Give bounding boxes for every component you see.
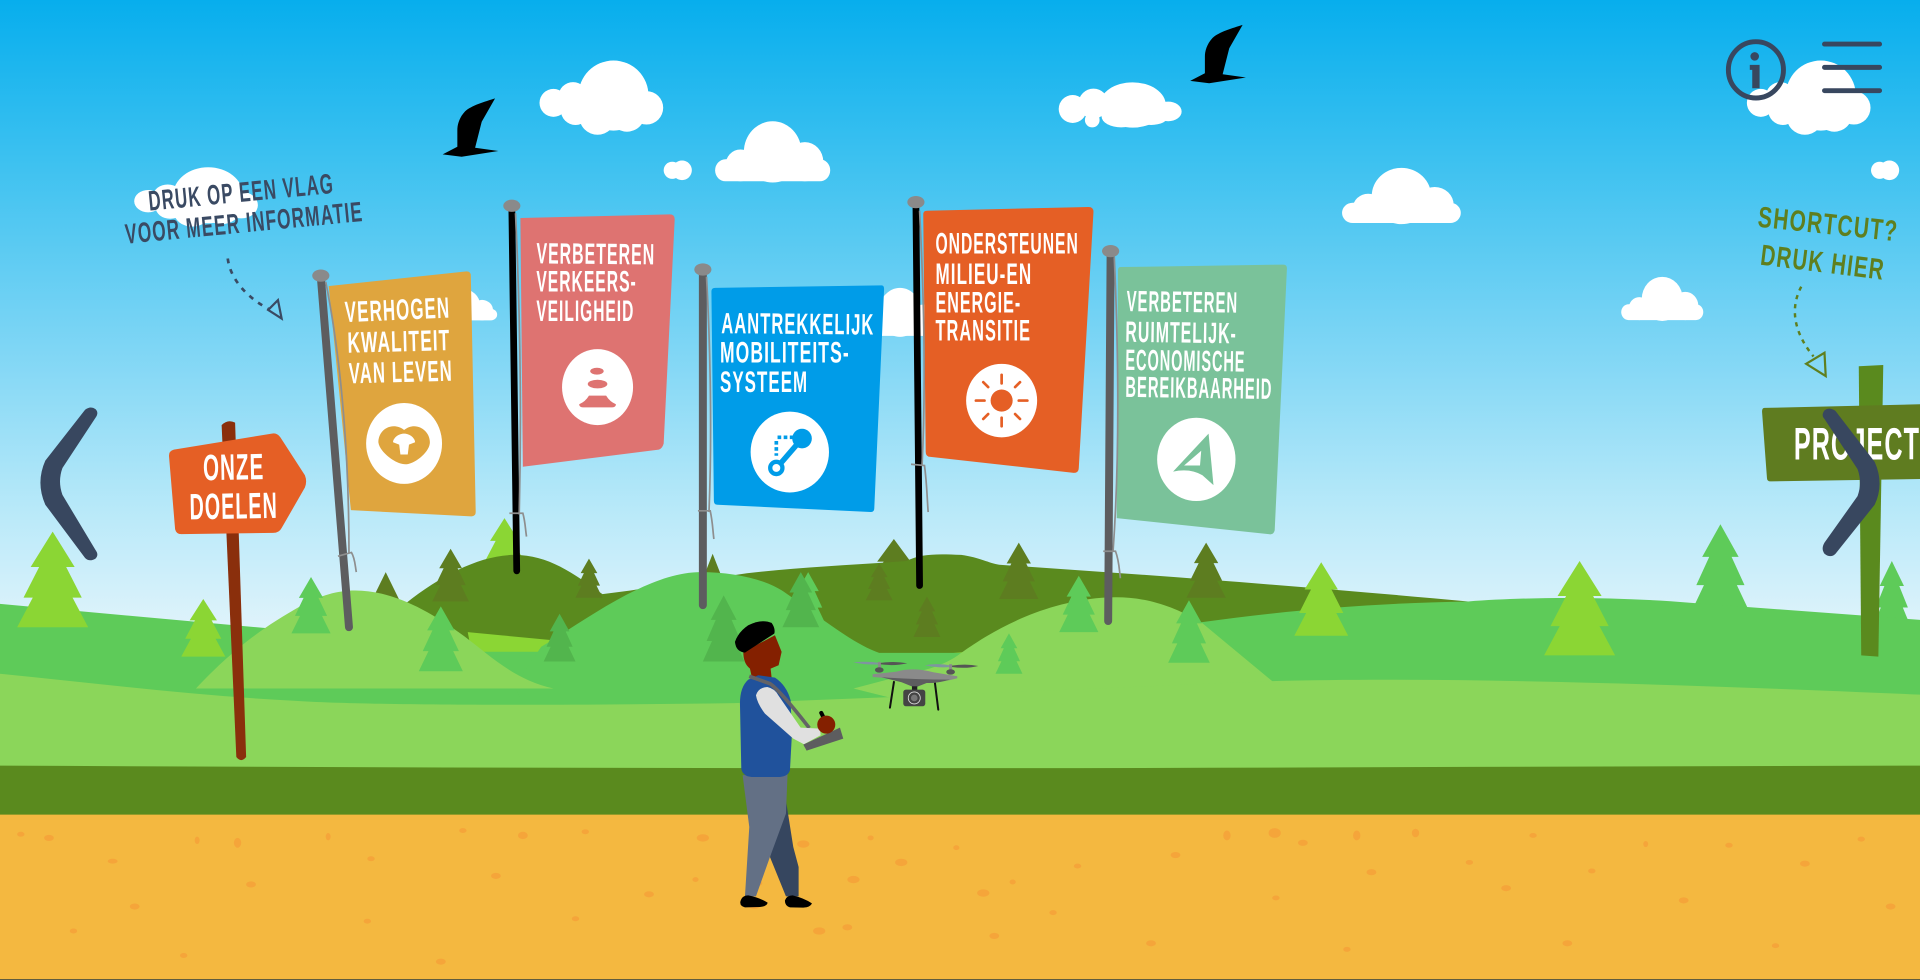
icon: info	[1728, 42, 1783, 98]
label: VERKEERS-	[536, 266, 637, 299]
icon: route	[751, 412, 829, 492]
label: BEREIKBAARHEID	[1125, 371, 1273, 406]
beret	[735, 621, 775, 653]
hill: right mid green	[1201, 598, 1920, 710]
arrow: next	[1823, 409, 1880, 556]
hill: left light green	[196, 590, 553, 688]
back leg	[770, 800, 799, 896]
sign post	[1859, 365, 1883, 657]
banner	[520, 214, 675, 467]
person with remote control	[735, 621, 843, 908]
rope	[698, 277, 714, 539]
label	[1125, 285, 1273, 406]
sky	[0, 0, 1920, 637]
pole	[700, 272, 706, 605]
label: ENERGIE-	[936, 286, 1021, 319]
drone	[853, 662, 978, 710]
sign text: DOELEN	[189, 485, 278, 527]
icon: menu	[1824, 44, 1880, 91]
sand path	[0, 815, 1920, 980]
hill: centre mid green	[514, 572, 967, 710]
banner	[923, 207, 1093, 473]
pole	[916, 205, 920, 586]
label: ONDERSTEUNEN	[936, 228, 1079, 261]
joystick	[821, 713, 825, 720]
sign board	[1762, 404, 1920, 481]
label: MOBILITEITS-	[720, 337, 850, 370]
label: TRANSITIE	[936, 315, 1031, 348]
label	[536, 237, 655, 328]
rope	[326, 282, 356, 572]
body	[873, 669, 957, 688]
clouds	[134, 61, 1899, 337]
head	[743, 635, 782, 678]
label: VERBETEREN	[1126, 285, 1238, 320]
label	[720, 307, 875, 399]
annotation: druk op een vlag	[124, 168, 364, 250]
sign post	[222, 421, 246, 760]
camera	[912, 686, 917, 691]
trees on the far ridge	[432, 543, 1226, 662]
sign board	[169, 433, 306, 534]
label	[936, 228, 1079, 348]
label: VAN LEVEN	[348, 355, 453, 390]
label: AANTREKKELIJK	[721, 307, 875, 342]
arrow: to the shortcut	[1795, 287, 1826, 376]
rope	[1103, 257, 1120, 578]
foreground light green field	[0, 674, 1920, 772]
sign: project	[1762, 365, 1920, 657]
icon: traffic cone	[562, 349, 633, 425]
arm	[756, 687, 821, 744]
icon: sun	[966, 364, 1037, 437]
label: ECONOMISCHE	[1125, 344, 1246, 379]
arrow: previous	[40, 407, 97, 560]
dark green band	[0, 766, 1920, 816]
banner	[329, 272, 475, 516]
label: VERHOGEN	[344, 292, 451, 329]
annotation: shortcut	[1756, 201, 1900, 287]
label: KWALITEIT	[347, 324, 451, 360]
rope	[509, 213, 527, 537]
annotation: druk op een vlag: DRUK OP EEN VLAG	[147, 168, 335, 217]
trees behind the hills	[364, 518, 1911, 646]
vest	[740, 675, 792, 777]
sign text: ONZE	[203, 446, 265, 488]
bright green patch	[468, 632, 557, 652]
hill: left mid green	[0, 604, 551, 784]
flag: verbeteren verkeersveiligheid	[503, 200, 675, 571]
label: MILIEU-EN	[936, 258, 1032, 291]
icon: navigation arrow	[1157, 418, 1236, 501]
hand	[817, 716, 835, 734]
controller	[803, 728, 843, 751]
propellers	[853, 662, 880, 665]
icon: bird right	[1190, 25, 1246, 83]
hill: right light green	[853, 597, 1272, 710]
strap	[749, 676, 809, 728]
sign text	[189, 446, 278, 527]
pole	[1108, 252, 1111, 621]
hill: far dark green ridge	[407, 554, 1468, 686]
banner	[711, 285, 884, 512]
icon: heart	[366, 403, 442, 484]
flag: verhogen kwaliteit van leven	[312, 270, 475, 627]
flag: ondersteunen milieu- en energietransitie	[907, 196, 1093, 586]
motors and arms	[879, 662, 951, 673]
pole	[512, 208, 517, 571]
label: SYSTEEM	[720, 366, 808, 399]
icon: bird left	[443, 98, 498, 157]
legs	[890, 682, 938, 710]
annotation: druk op een vlag: VOOR MEER INFORMATIE	[124, 196, 364, 250]
sign: onze doelen	[169, 421, 306, 760]
label	[344, 292, 453, 390]
banner	[1117, 265, 1287, 534]
label: VEILIGHEID	[536, 295, 634, 328]
flag: aantrekkelijk mobiliteitssysteem	[694, 263, 884, 605]
flag: verbeteren ruimtelijk-economische bereikbaarheid	[1102, 245, 1287, 621]
rope	[911, 211, 928, 512]
trees in front of the hills	[17, 532, 1615, 674]
label: RUIMTELIJK-	[1125, 316, 1237, 350]
label: VERBETEREN	[536, 237, 655, 271]
shoes	[740, 895, 812, 908]
pole	[321, 277, 349, 627]
arrow: to the flags	[228, 258, 282, 318]
front leg	[743, 773, 788, 896]
